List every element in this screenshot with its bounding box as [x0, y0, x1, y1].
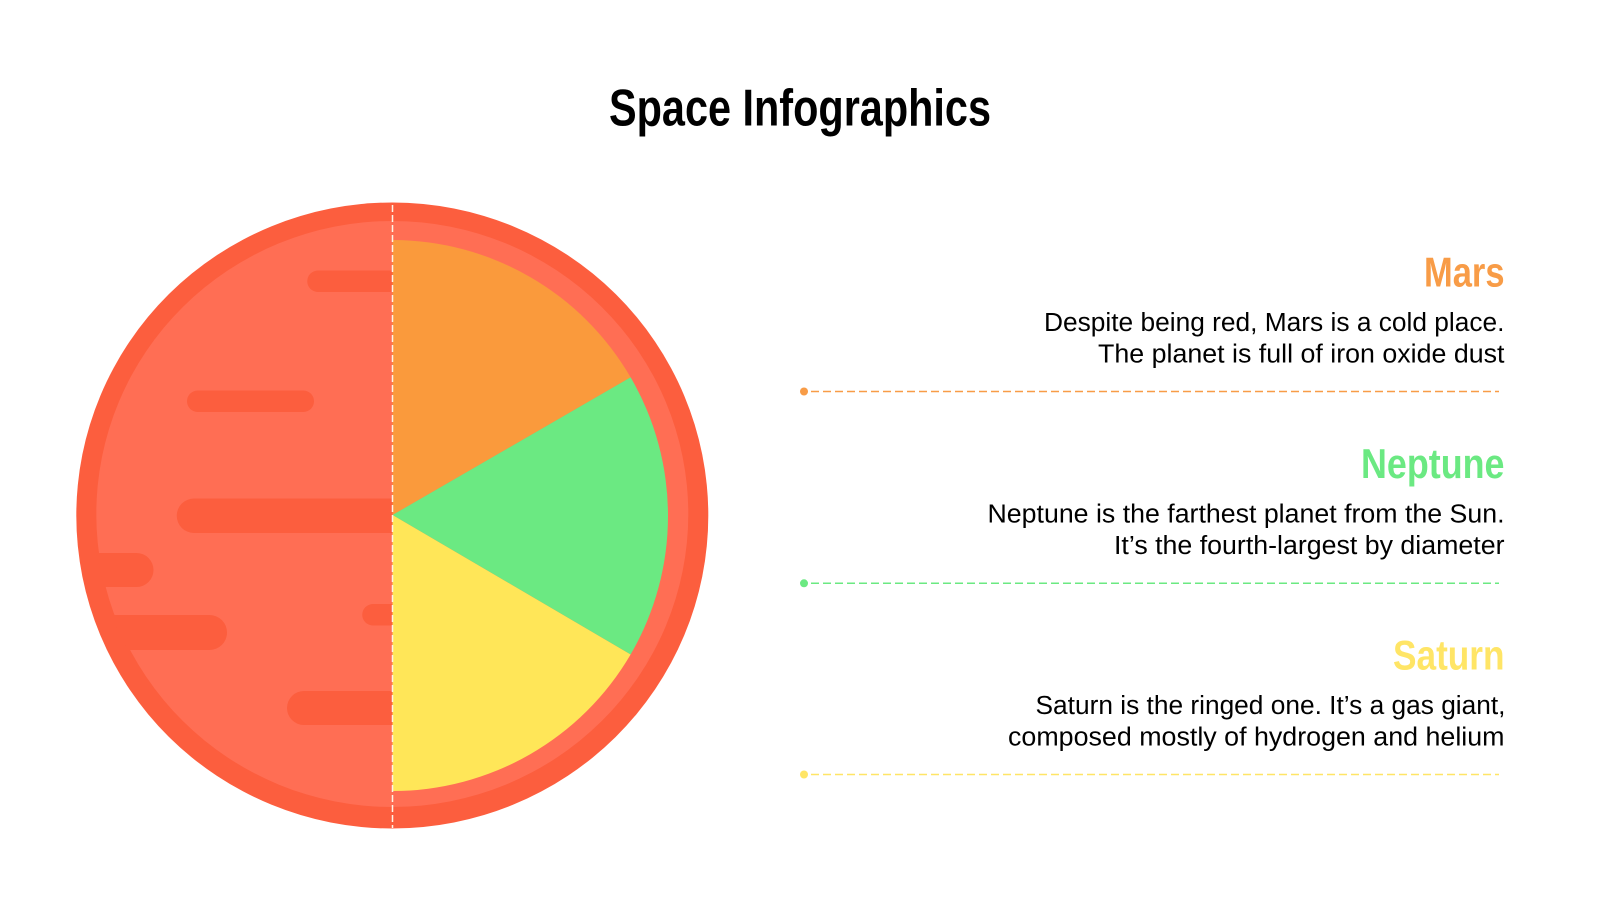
- surface stripes: [96, 270, 392, 725]
- dashed divider: Saturn: [800, 770, 1499, 778]
- pie slice: Neptune: [392, 377, 668, 654]
- heading: Saturn: Saturn: [1393, 632, 1504, 678]
- pie slice: Mars: [392, 240, 631, 515]
- heading: Neptune: Neptune: [1361, 440, 1504, 487]
- heading: Mars: Mars: [1424, 248, 1504, 296]
- text: Mars description: The planet is full of iron oxide dust: [1098, 340, 1504, 368]
- text: Saturn description: Saturn is the ringed one. It’s a gas giant,: [1036, 692, 1506, 720]
- dashed divider: Mars: [800, 388, 1499, 396]
- panel: Neptune: [800, 440, 1505, 587]
- text: Mars description: Despite being red, Mars is a cold place.: [1044, 309, 1504, 337]
- text: Mars description: [1044, 309, 1504, 368]
- pie slice: Saturn: [392, 515, 631, 791]
- planet inner surface: [96, 221, 688, 807]
- text: Neptune description: It’s the fourth-largest by diameter: [1114, 532, 1505, 560]
- dashed divider: Neptune: [800, 579, 1499, 587]
- panel: Saturn: [800, 632, 1506, 778]
- title: Space Infographics: [609, 80, 991, 138]
- text: Neptune description: [988, 500, 1505, 560]
- panel: Mars: [800, 248, 1504, 396]
- text: Saturn description: [1008, 692, 1506, 752]
- planet outer ring: [76, 202, 708, 828]
- center dashed axis: [392, 205, 394, 828]
- text: Saturn description: composed mostly of hydrogen and helium: [1008, 724, 1504, 752]
- planet diagram: [76, 202, 708, 828]
- text: Neptune description: Neptune is the farthest planet from the Sun.: [988, 500, 1504, 528]
